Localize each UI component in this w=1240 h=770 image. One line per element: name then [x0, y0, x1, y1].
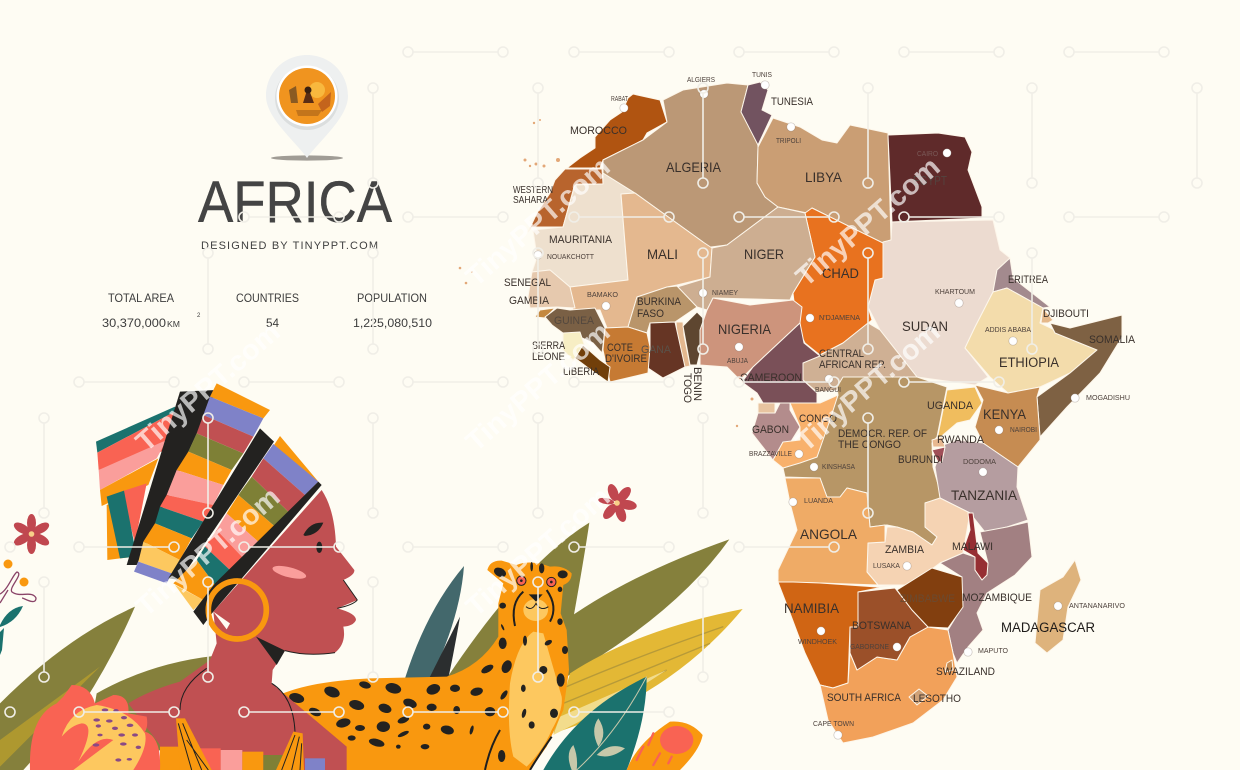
turban black strip	[127, 390, 217, 565]
country name labels: LESOTHO	[913, 693, 961, 705]
country: Kenya	[975, 385, 1040, 467]
country name labels: MOROCCO	[570, 125, 627, 137]
country: South Africa	[820, 627, 957, 743]
country: Senegal	[528, 270, 575, 308]
country name labels: MALAWI	[952, 541, 993, 553]
country: Swaziland	[945, 660, 953, 672]
country: Burundi	[932, 447, 945, 462]
country: Madagascar	[1035, 560, 1081, 653]
capital city labels: WINDHOEK	[798, 637, 837, 646]
country name labels: LIBERIA	[563, 366, 600, 378]
country name labels: CONGO	[799, 413, 837, 425]
country: Morocco	[567, 94, 667, 168]
country: Chad	[793, 208, 883, 355]
country: Eritrea	[993, 258, 1050, 308]
capital city labels: TRIPOLI	[776, 136, 801, 145]
country: Central African Republic	[803, 323, 917, 392]
capital city labels: N'DJAMENA	[819, 313, 860, 322]
country: Zimbabwe	[897, 568, 963, 628]
capital city labels: NIAMEY	[712, 288, 738, 297]
country name labels: CAMEROON	[740, 372, 802, 384]
country: Cote d'Ivoire	[603, 327, 650, 382]
leaves behind woman	[0, 607, 135, 770]
country name labels: COTE	[607, 342, 633, 354]
turban black strip 2	[168, 428, 274, 580]
country name labels: CENTRAL	[819, 348, 864, 360]
country: Mozambique	[940, 522, 1032, 663]
capital city labels: LUANDA	[804, 496, 833, 505]
turban striped band 1	[210, 383, 270, 418]
illustration: woman, flora and cheetah	[0, 383, 743, 770]
country: Algeria	[603, 83, 778, 248]
watermarks: TinyPPT.com	[130, 481, 286, 622]
country: Niger	[677, 207, 815, 310]
country name labels: UGANDA	[927, 400, 974, 412]
country: Nigeria	[700, 298, 802, 380]
country name labels: AFRICAN REP.	[819, 359, 886, 371]
country name labels: ZAMBIA	[885, 544, 925, 556]
icon: location pin	[266, 55, 348, 161]
country name labels: SIERRA	[532, 340, 566, 352]
country name labels: DJIBOUTI	[1043, 308, 1089, 320]
country name labels: THE CONGO	[838, 439, 901, 451]
statistics: 2	[197, 313, 201, 319]
country name labels: BOTSWANA	[852, 620, 912, 632]
statistics: 30,370,000	[102, 318, 166, 330]
country name labels: TOGO	[681, 373, 693, 403]
capital city labels: ANTANANARIVO	[1069, 601, 1125, 610]
country name labels: ETHIOPIA	[999, 355, 1059, 370]
map of Africa	[459, 82, 1122, 743]
country name labels: BURUNDI	[898, 454, 943, 466]
country name labels: LEONE	[532, 351, 565, 363]
country: Togo	[683, 312, 707, 365]
statistics: 54	[266, 318, 280, 330]
islands	[459, 119, 754, 427]
country: Liberia	[575, 345, 610, 382]
country: Botswana	[850, 588, 928, 670]
country: Guinea-Bissau	[535, 308, 555, 318]
capital city labels: GABORONE	[850, 642, 889, 651]
statistics: TOTAL AREA	[108, 293, 174, 305]
country: Uganda	[937, 387, 982, 440]
country: Western Sahara	[528, 169, 603, 232]
capital city labels: LUSAKA	[873, 561, 900, 570]
country: Equatorial Guinea	[758, 403, 775, 413]
country name labels: SUDAN	[902, 318, 948, 334]
country: Cameroon	[742, 323, 820, 403]
country: Tanzania	[935, 440, 1028, 532]
eye and cheek	[303, 523, 323, 536]
country name labels: LIBYA	[805, 170, 842, 185]
country: Sierra Leone	[563, 332, 585, 360]
country name labels: ERITREA	[1008, 274, 1049, 286]
country name labels: GAMBIA	[509, 295, 550, 307]
country name labels: EGYPT	[913, 173, 947, 188]
necklace and dress	[160, 747, 180, 770]
country name labels: NIGERIA	[718, 321, 772, 337]
turban black strip 3	[193, 482, 322, 625]
country: Sudan	[868, 220, 1010, 385]
country name labels: GANA	[641, 344, 672, 356]
capital city dots	[534, 81, 1079, 739]
country name labels: ALGERIA	[666, 159, 722, 175]
country: Burkina Faso	[628, 286, 697, 333]
turban back flap	[96, 407, 177, 453]
cheetah	[273, 561, 572, 770]
country: Malawi	[963, 513, 988, 580]
cheetah spots	[288, 562, 568, 762]
capital city labels: ALGIERS	[687, 75, 715, 84]
woman with turban	[0, 383, 357, 770]
capital city labels	[547, 70, 1130, 728]
watermarks: TinyPPT.com	[460, 151, 616, 292]
capital city labels: TUNIS	[752, 70, 772, 79]
capital city labels: ABUJA	[727, 356, 748, 365]
capital city labels: MOGADISHU	[1086, 393, 1130, 402]
leaves behind cheetah	[405, 523, 743, 770]
capital city labels: KINSHASA	[822, 462, 855, 471]
country: Zambia	[867, 498, 970, 585]
capital city labels: ADDIS ABABA	[985, 325, 1031, 334]
capital city labels: KHARTOUM	[935, 287, 975, 296]
country name labels: D'IVOIRE	[605, 353, 647, 365]
country: Namibia	[778, 582, 893, 688]
country name labels: BURKINA	[637, 296, 682, 308]
country name labels: SWAZILAND	[936, 666, 995, 678]
country: Democratic Republic of the Congo	[783, 377, 947, 545]
country: Libya	[757, 118, 891, 243]
capital city labels: MAPUTO	[978, 646, 1008, 655]
country: Ghana	[648, 322, 685, 378]
watermarks: TinyPPT.com	[790, 316, 946, 457]
hair	[256, 637, 285, 665]
title: AFRICA	[198, 170, 392, 235]
country name labels: SOUTH AFRICA	[827, 692, 902, 704]
earring	[213, 612, 230, 629]
country name labels: SAHARA	[513, 195, 548, 206]
country name labels: GUINEA	[554, 315, 595, 327]
country name labels: BENIN	[691, 367, 703, 401]
watermarks: TinyPPT.com	[130, 316, 286, 457]
country: Lesotho	[909, 689, 928, 705]
country: Mali	[570, 193, 712, 328]
country name labels: SENEGAL	[504, 277, 551, 289]
country: Benin	[676, 322, 690, 368]
icon: red flower left	[12, 514, 51, 554]
country: Guinea	[545, 308, 605, 353]
statistics: POPULATION	[357, 293, 427, 305]
statistics	[102, 293, 432, 330]
country: Tunisia	[741, 82, 772, 145]
country name labels: MAURITANIA	[549, 234, 613, 246]
watermarks: TinyPPT.com	[790, 151, 946, 292]
country: Gabon	[752, 403, 800, 460]
country name labels: NIGER	[744, 246, 784, 262]
country name labels: CHAD	[822, 266, 859, 281]
country: Angola	[778, 478, 885, 585]
country: Congo	[773, 395, 838, 468]
country name labels: WESTERN	[513, 185, 553, 196]
capital city labels: NOUAKCHOTT	[547, 252, 594, 261]
country: Somalia	[1037, 315, 1122, 437]
country name labels: FASO	[637, 308, 664, 320]
icon: red flower right	[598, 483, 638, 523]
watermarks	[130, 151, 946, 622]
country: Egypt	[888, 133, 982, 222]
country: Mauritania	[532, 173, 635, 287]
country name labels: MALI	[647, 246, 678, 262]
country: Ethiopia	[965, 288, 1097, 393]
country name labels: TUNESIA	[771, 96, 814, 108]
watermarks: TinyPPT.com	[460, 316, 616, 457]
capital city labels: RABAT	[611, 94, 628, 103]
country name labels: SOMALIA	[1089, 334, 1136, 346]
country name labels	[504, 96, 1136, 705]
tulip flower	[30, 685, 160, 770]
country name labels: MADAGASCAR	[1001, 620, 1095, 635]
country name labels: ANGOLA	[800, 526, 858, 542]
country name labels: MOZAMBIQUE	[962, 592, 1032, 604]
country name labels: KENYA	[983, 406, 1027, 422]
capital city labels: BANGUI	[815, 385, 841, 394]
statistics: COUNTRIES	[236, 293, 299, 305]
country name labels: TANZANIA	[951, 488, 1017, 503]
watermarks: TinyPPT.com	[460, 481, 616, 622]
country name labels: DEMOCR. REP. OF	[838, 428, 927, 440]
country name labels: GABON	[752, 424, 789, 436]
statistics: 1,225,080,510	[353, 318, 432, 330]
country name labels: ZIMBABWE	[900, 593, 955, 605]
capital city labels: BRAZZAVILLE	[749, 449, 792, 458]
country: Rwanda	[932, 437, 945, 447]
subtitle: DESIGNED BY TINYPPT.COM	[201, 240, 378, 252]
country name labels: RWANDA	[937, 434, 985, 446]
capital city labels: CAPE TOWN	[813, 719, 854, 728]
capital city labels: CAIRO	[917, 149, 938, 158]
country name labels: NAMIBIA	[784, 600, 840, 616]
icon: left plant	[0, 560, 36, 655]
body and face	[128, 490, 357, 770]
capital city labels: BAMAKO	[587, 290, 618, 299]
capital city labels: NAIROBI	[1010, 425, 1037, 434]
capital city labels: DODOMA	[963, 457, 996, 466]
turban striped band 2	[274, 436, 318, 495]
country: Djibouti	[1041, 308, 1053, 323]
statistics: KM	[167, 319, 180, 329]
